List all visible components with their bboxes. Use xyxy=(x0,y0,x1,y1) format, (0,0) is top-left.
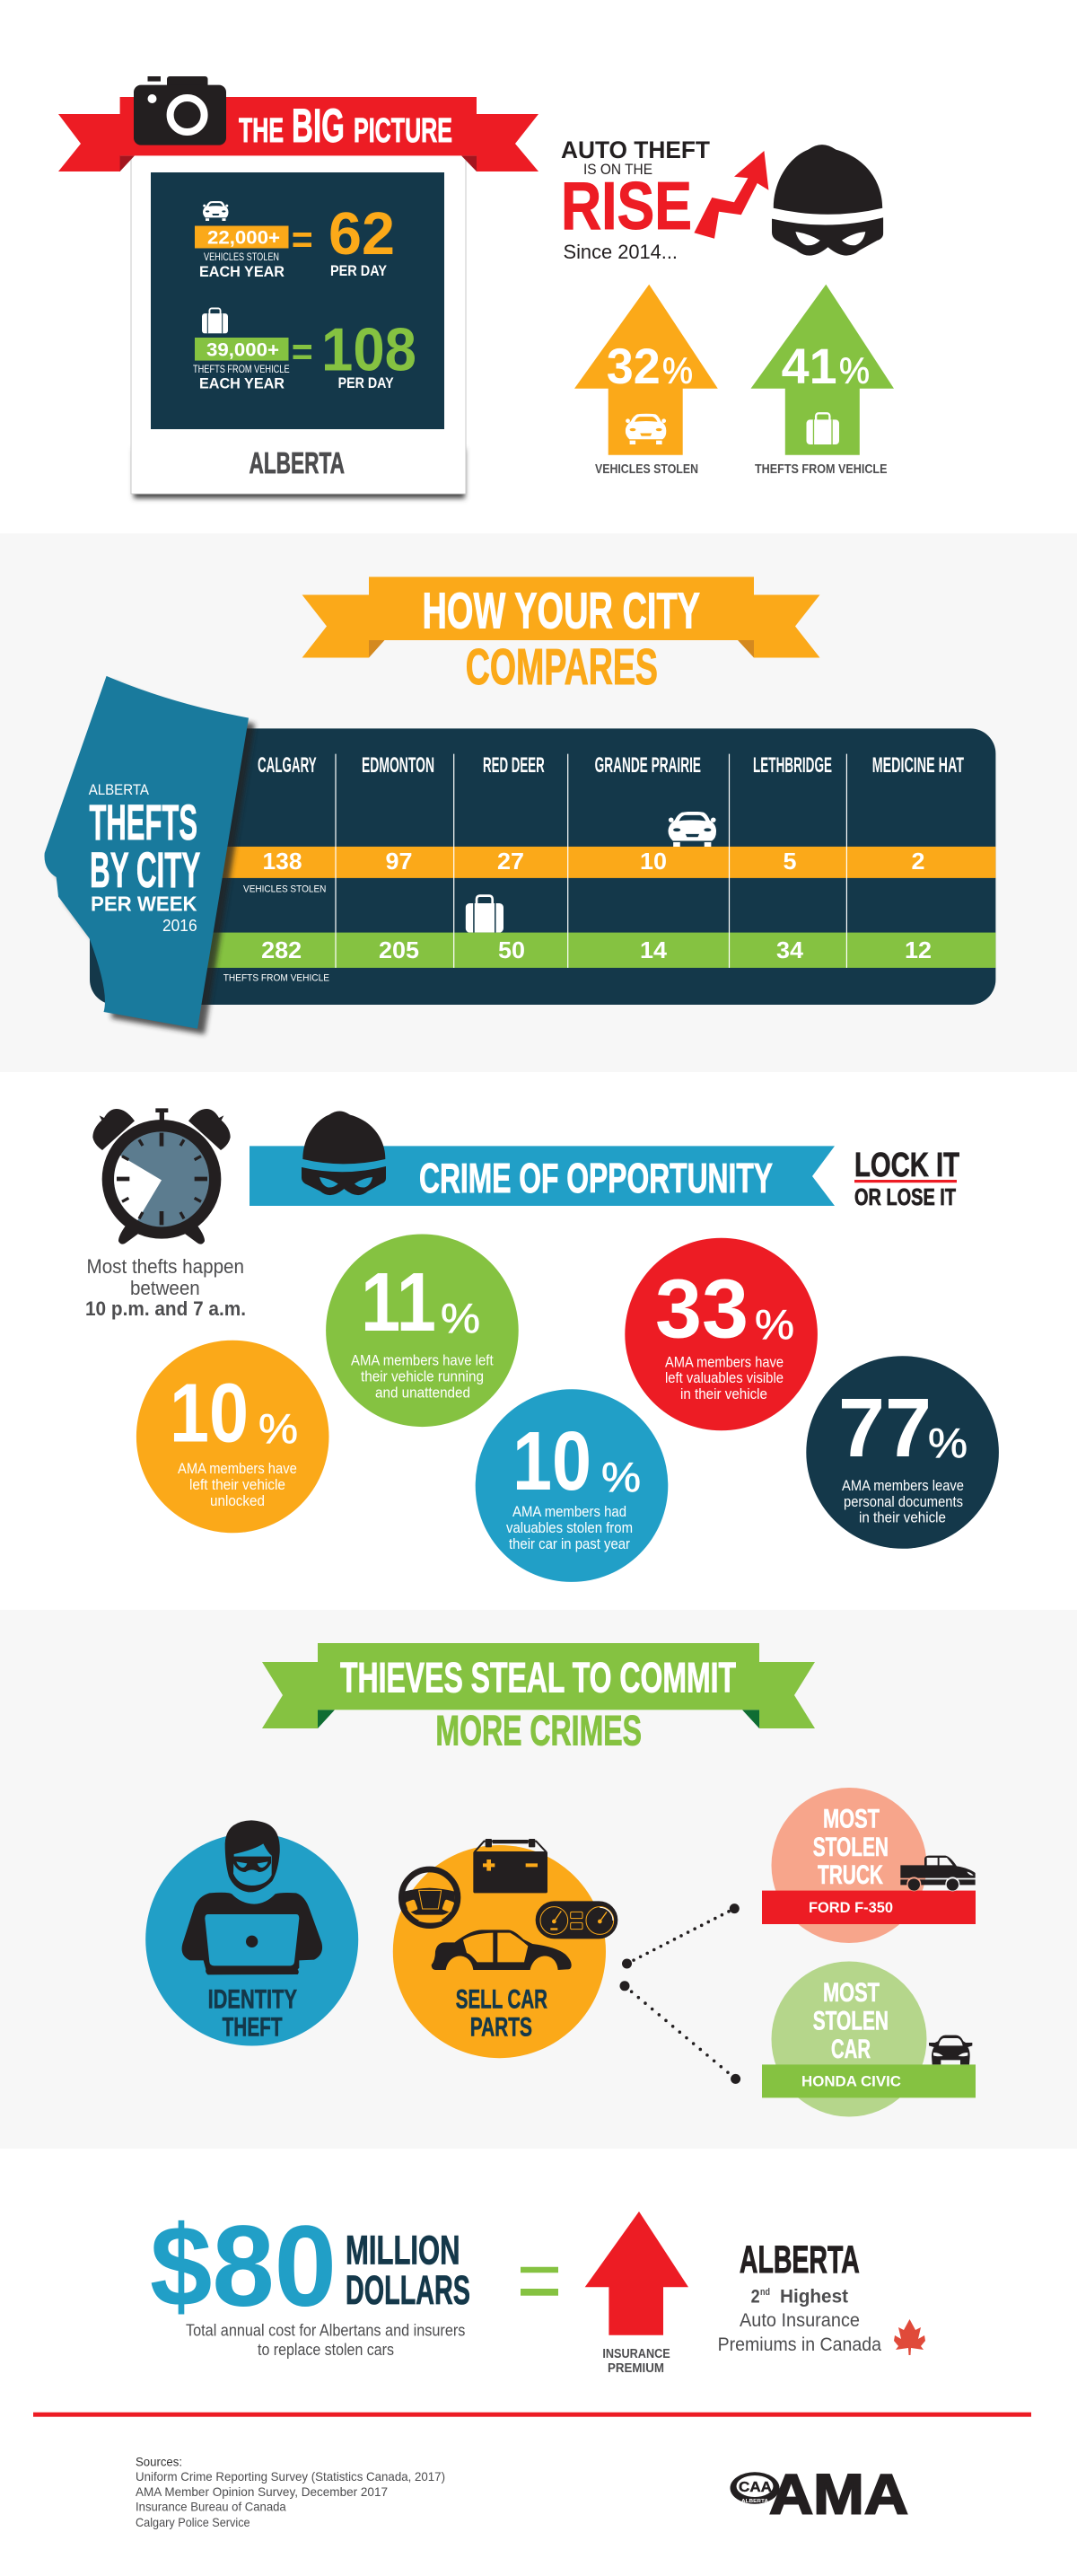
row label: thefts from vehicle: THEFTS FROM VEHICLE xyxy=(223,973,329,984)
sources: Sources: xyxy=(136,2455,182,2469)
blue ribbon xyxy=(250,1146,835,1206)
stat circle: 77 percent: % xyxy=(928,1420,968,1466)
stat circle: 11 percent: AMA members have left xyxy=(351,1352,494,1369)
label: MOST xyxy=(823,1805,880,1834)
million dollars: MILLION xyxy=(346,2228,460,2273)
clock caption: 10 p.m. and 7 a.m. xyxy=(85,1297,246,1320)
dark stats panel xyxy=(151,172,444,429)
heading: auto theft: AUTO THEFT xyxy=(561,136,710,163)
row label: vehicles stolen: VEHICLES STOLEN xyxy=(243,884,326,895)
vehicles stolen values xyxy=(262,848,924,875)
stat circle: 10 percent unlocked xyxy=(136,1341,328,1533)
logo: CAA AMA: CAA xyxy=(739,2480,772,2495)
circle: identity theft xyxy=(145,1820,358,2045)
each year: EACH YEAR xyxy=(199,263,285,280)
heading: the big picture: PICTURE xyxy=(354,112,452,150)
thefts from vehicle values: 14 xyxy=(640,936,668,963)
panel: cost of theft xyxy=(150,2202,925,2376)
map title: THEFTS xyxy=(90,794,197,850)
column dividers xyxy=(336,754,846,968)
icon: thief xyxy=(302,1111,386,1195)
stat: thefts from vehicle xyxy=(193,308,416,392)
column headers: LETHBRIDGE xyxy=(753,753,832,778)
panel: how your city compares xyxy=(45,576,995,1034)
count: 22,000+ xyxy=(207,228,280,248)
icon: bag xyxy=(806,413,839,444)
divider line xyxy=(33,2413,1031,2417)
arrow: thefts from vehicle 41 percent xyxy=(750,285,894,455)
label: THEFT xyxy=(223,2013,283,2043)
dotted connector to truck xyxy=(622,1903,740,1968)
heading: the big picture: BIG xyxy=(292,100,345,153)
number 108: 108 xyxy=(321,315,416,383)
stat circle: 33 percent: 33 xyxy=(655,1262,749,1356)
since 2014: Since 2014... xyxy=(564,241,678,263)
each year: EACH YEAR xyxy=(199,375,285,392)
label: STOLEN xyxy=(813,2007,889,2036)
stat circle: 77 percent: AMA members leave xyxy=(842,1477,964,1494)
stat circle: 33 percent: % xyxy=(755,1301,794,1348)
icon: camera xyxy=(134,76,226,145)
sources: Insurance Bureau of Canada xyxy=(136,2500,286,2514)
vehicles stolen values: 97 xyxy=(386,848,413,875)
label: vehicles stolen: VEHICLES STOLEN xyxy=(595,462,698,477)
label: thefts from vehicle: THEFTS FROM VEHICLE xyxy=(755,462,888,477)
auto insurance premiums: Premiums in Canada xyxy=(718,2334,881,2355)
arrow: vehicles stolen 32 percent xyxy=(574,285,718,455)
column headers xyxy=(258,753,964,778)
vehicles stolen values: 138 xyxy=(262,848,302,875)
second highest: nd xyxy=(760,2287,770,2298)
label xyxy=(813,1978,889,2064)
vehicles stolen values: 2 xyxy=(912,848,924,875)
icon: car xyxy=(668,812,716,847)
stat circle: 10 percent unlocked: left their vehicle xyxy=(189,1476,285,1493)
stat circle: 10 percent stolen: 10 xyxy=(512,1414,591,1508)
stat circle: 10 percent stolen: % xyxy=(601,1454,641,1500)
percent sign: % xyxy=(839,350,870,391)
icon: car xyxy=(203,201,228,221)
label: STOLEN xyxy=(813,1833,889,1862)
arrow label xyxy=(602,2347,670,2376)
column headers: RED DEER xyxy=(483,753,545,778)
thefts from vehicle values: 34 xyxy=(776,936,804,963)
icons: car parts xyxy=(401,1839,617,1970)
green ribbon xyxy=(262,1643,815,1728)
map title xyxy=(89,781,200,935)
sources: AMA Member Opinion Survey, December 2017 xyxy=(136,2484,388,2499)
sources: Uniform Crime Reporting Survey (Statistics Canada, 2017) xyxy=(136,2469,445,2484)
thefts from vehicle values: 12 xyxy=(905,936,932,963)
map title: BY CITY xyxy=(90,841,200,898)
arrow: insurance premium xyxy=(585,2211,688,2335)
caption: VEHICLES STOLEN xyxy=(204,251,279,263)
arrow label: PREMIUM xyxy=(608,2361,664,2376)
red name bar xyxy=(762,1891,976,1924)
stat circle: 77 percent xyxy=(806,1356,999,1549)
orange ribbon xyxy=(302,576,820,657)
stat circle: 33 percent: AMA members have xyxy=(665,1354,784,1370)
column headers: EDMONTON xyxy=(362,753,434,778)
panel: crime of opportunity xyxy=(85,1108,999,1582)
icon: small car xyxy=(929,2035,972,2064)
label xyxy=(208,1985,297,2043)
value: 41 xyxy=(782,338,837,394)
section background: more crimes xyxy=(0,1610,1077,2149)
thefts from vehicle values: 282 xyxy=(261,936,302,963)
icon: alarm clock xyxy=(92,1108,231,1244)
heading: is on the: IS ON THE xyxy=(583,161,652,178)
circle: sell car parts xyxy=(393,1839,617,2058)
icon: maple leaf xyxy=(894,2319,925,2355)
stat circle: 10 percent unlocked: AMA members have xyxy=(178,1460,297,1477)
green row xyxy=(180,933,995,968)
panel: thieves steal to commit more crimes xyxy=(145,1643,976,2117)
stat circle: 11 percent xyxy=(326,1234,519,1427)
icon: hacker with laptop xyxy=(182,1820,322,1974)
stat circle: 10 percent stolen: AMA members had xyxy=(512,1503,626,1520)
thefts from vehicle values: 205 xyxy=(379,936,419,963)
stat circle: 11 percent: and unattended xyxy=(375,1384,470,1401)
clock caption: between xyxy=(130,1277,200,1299)
map title: 2016 xyxy=(162,917,197,935)
stat circle: 77 percent: personal documents xyxy=(844,1493,963,1510)
cost description: to replace stolen cars xyxy=(258,2341,394,2359)
number 62: 62 xyxy=(328,200,395,268)
label: SELL CAR xyxy=(456,1985,547,2015)
stat circle: 77 percent: 77 xyxy=(838,1381,932,1474)
stat circle: 11 percent: their vehicle running xyxy=(361,1368,484,1385)
count: 39,000+ xyxy=(206,339,279,361)
map title: PER WEEK xyxy=(91,892,197,916)
label: TRUCK xyxy=(818,1860,883,1890)
auto insurance premiums: Auto Insurance xyxy=(740,2310,860,2331)
column headers: CALGARY xyxy=(258,753,317,778)
thefts from vehicle values xyxy=(261,936,932,963)
green label box xyxy=(195,338,289,361)
stat circle: 33 percent: left valuables visible xyxy=(665,1369,784,1386)
green name bar xyxy=(762,2064,976,2097)
sources: Calgary Police Service xyxy=(136,2515,250,2529)
equals xyxy=(293,345,311,359)
vehicles stolen values: 27 xyxy=(497,848,524,875)
icon: bag xyxy=(202,308,228,333)
slogan: lock it or lose it: LOCK IT xyxy=(854,1147,959,1184)
photo frame xyxy=(131,153,466,498)
stat circle: 33 percent: in their vehicle xyxy=(680,1385,767,1402)
second highest: 2 xyxy=(751,2286,760,2307)
logo: CAA AMA: AMA xyxy=(769,2463,908,2526)
slogan: lock it or lose it xyxy=(854,1147,959,1210)
cost description xyxy=(186,2322,465,2359)
amount: 80 dollars: $80 xyxy=(150,2202,337,2331)
percent sign: % xyxy=(662,350,693,391)
second highest: Highest xyxy=(780,2286,848,2307)
map title: ALBERTA xyxy=(89,781,150,798)
heading: the big picture xyxy=(239,100,452,153)
column headers: MEDICINE HAT xyxy=(872,753,964,778)
caption: THEFTS FROM VEHICLE xyxy=(193,363,290,375)
stat circle: 10 percent stolen: their car in past year xyxy=(509,1535,630,1552)
table: thefts by city xyxy=(90,728,995,1005)
label xyxy=(813,1805,889,1890)
second highest xyxy=(751,2286,848,2307)
section background: city comparison xyxy=(0,533,1077,1072)
heading line 1: THIEVES STEAL TO COMMIT xyxy=(340,1653,736,1701)
heading: rise: RISE xyxy=(561,168,692,243)
label: PARTS xyxy=(470,2013,532,2043)
stat circle: 10 percent unlocked: % xyxy=(258,1405,298,1452)
cost description: Total annual cost for Albertans and insurers xyxy=(186,2322,465,2340)
heading: crime of opportunity: CRIME OF OPPORTUNITY xyxy=(419,1155,773,1201)
clock caption xyxy=(85,1255,246,1320)
arrow label: INSURANCE xyxy=(602,2347,670,2361)
panel: auto theft on the rise xyxy=(561,136,894,477)
million dollars xyxy=(346,2228,470,2313)
stat: vehicles stolen xyxy=(195,200,395,280)
label: MOST xyxy=(823,1978,880,2008)
heading: the big picture: THE xyxy=(239,112,284,150)
stat circle: 11 percent: 11 xyxy=(361,1255,436,1349)
arrow: zigzag rising xyxy=(694,151,768,239)
label xyxy=(456,1985,547,2043)
dotted connector to car xyxy=(619,1981,740,2084)
clock caption: Most thefts happen xyxy=(86,1255,244,1278)
equals xyxy=(521,2267,558,2296)
stat circle: 10 percent unlocked: 10 xyxy=(170,1367,249,1460)
stat circle: 10 percent stolen: valuables stolen from xyxy=(506,1519,633,1536)
per day: PER DAY xyxy=(330,262,388,279)
orange label box xyxy=(195,226,289,248)
icon: truck xyxy=(900,1856,976,1891)
sources xyxy=(136,2455,445,2529)
column headers: GRANDE PRAIRIE xyxy=(595,753,701,778)
logo: CAA AMA: ALBERTA xyxy=(741,2499,768,2504)
heading line 2: COMPARES xyxy=(466,638,658,696)
heading line 2: MORE CRIMES xyxy=(435,1706,642,1754)
stat circle: 77 percent: in their vehicle xyxy=(859,1509,946,1526)
icon: car xyxy=(626,414,666,444)
stat circle: 11 percent: % xyxy=(441,1295,480,1341)
vehicles stolen values: 10 xyxy=(640,848,667,875)
per day: PER DAY xyxy=(338,374,394,391)
auto insurance premiums xyxy=(718,2310,881,2355)
model name: FORD F-350 xyxy=(809,1899,893,1916)
stat circle: 10 percent stolen xyxy=(476,1389,668,1582)
alberta caption: ALBERTA xyxy=(250,447,345,480)
model name: HONDA CIVIC xyxy=(801,2072,901,2090)
orange row xyxy=(180,847,995,878)
stat circle: 33 percent xyxy=(625,1238,818,1430)
vehicles stolen values: 5 xyxy=(783,848,797,875)
value: 32 xyxy=(607,338,661,394)
equals xyxy=(293,233,311,247)
alberta map shape xyxy=(45,676,255,1034)
slogan: lock it or lose it: OR LOSE IT xyxy=(854,1183,956,1210)
heading line 1: HOW YOUR CITY xyxy=(422,582,700,639)
most stolen car xyxy=(762,1961,976,2117)
most stolen truck xyxy=(762,1788,976,1943)
stat circle: 10 percent unlocked: unlocked xyxy=(210,1492,265,1509)
alberta heading: ALBERTA xyxy=(740,2238,860,2281)
label: CAR xyxy=(831,2035,871,2064)
red ribbon xyxy=(58,97,538,171)
thefts from vehicle values: 50 xyxy=(498,936,525,963)
label: IDENTITY xyxy=(208,1985,297,2015)
icon: bag xyxy=(466,896,503,933)
icon: thief xyxy=(772,145,883,256)
panel: the big picture xyxy=(58,76,538,498)
million dollars: DOLLARS xyxy=(346,2267,470,2313)
